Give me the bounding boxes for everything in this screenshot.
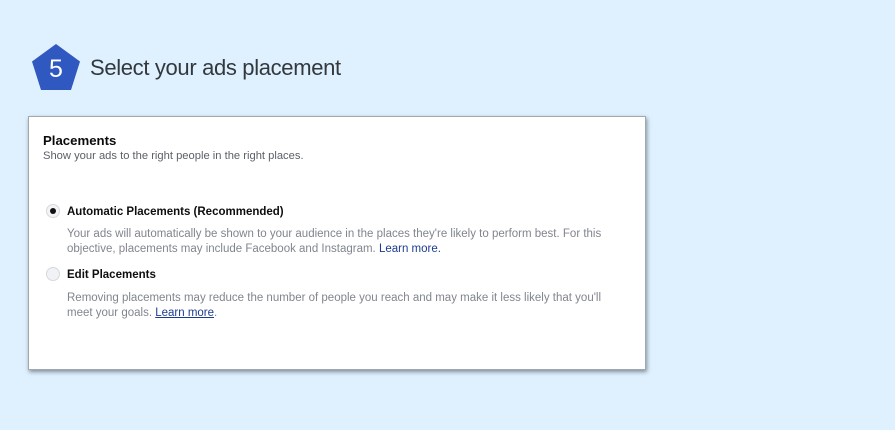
panel subheading: Show your ads to the right people in the right places. [43,150,304,162]
icon: step 5 pentagon: 5 [49,55,63,83]
panel heading: Placements [43,133,116,148]
title: Select your ads placement [90,55,341,80]
icon: selected radio [46,204,60,218]
option description: edit [67,292,601,319]
option description: automatic: objective, placements may include Facebook and Instagram. Learn more. [67,243,441,255]
option label: edit: Edit Placements [67,269,156,281]
icon: step 5 pentagon [32,44,80,90]
option description: edit: Removing placements may reduce the number of people you reach and may make it less likely that you'll [67,292,601,304]
panel: placements [28,116,646,370]
icon: unselected radio [46,267,60,281]
option description: automatic: Your ads will automatically be shown to your audience in the places they're likely to perform best. For this [67,228,601,240]
option label: automatic: Automatic Placements (Recommended) [67,206,284,218]
option description: automatic [67,228,601,255]
option description: edit: meet your goals. Learn more. [67,307,217,319]
